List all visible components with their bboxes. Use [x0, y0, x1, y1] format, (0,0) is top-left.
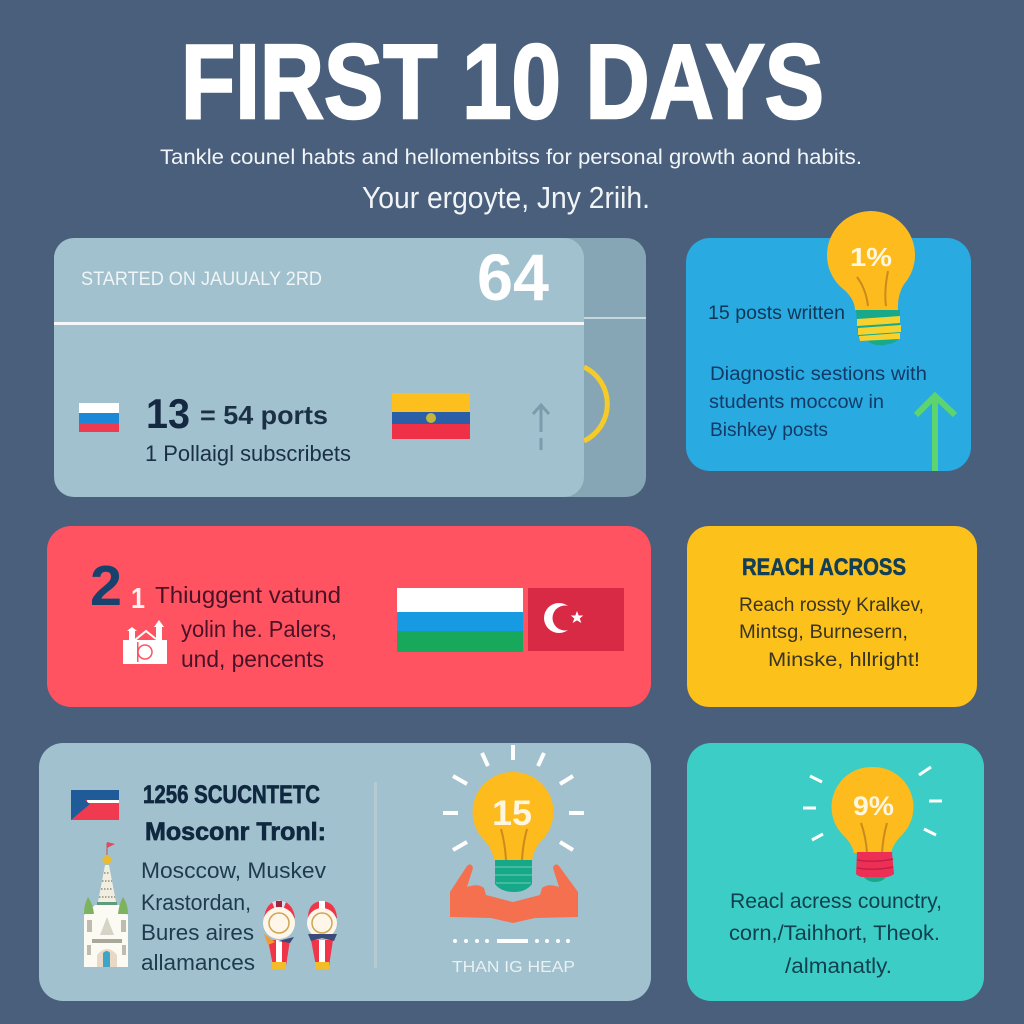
- cities text: allamances: [141, 950, 255, 975]
- divider: [374, 782, 377, 968]
- icon: light bulb 9%: [803, 767, 942, 882]
- icon: two matryoshka figures: [263, 900, 337, 969]
- reach text: Reach rossty Kralkev,: [739, 595, 924, 616]
- diagnostic text: Diagnostic sestions with: [710, 364, 927, 385]
- red panel text: yolin he. Palers,: [181, 616, 337, 642]
- dots: [453, 939, 570, 943]
- big number 64: 64: [477, 240, 549, 314]
- diagnostic text: [709, 364, 927, 441]
- icon: light bulb 1%: 1%: [850, 242, 892, 272]
- subtitle: Tankle counel habts and hellomenbitss for personal growth aond habits.: [160, 146, 862, 169]
- arrow: up: [533, 405, 549, 450]
- big number 2: 2: [90, 554, 122, 618]
- heading number line: 1256 SCUCNTETC: [143, 781, 320, 809]
- cities text: Bures aires: [141, 920, 254, 945]
- teal panel text: corn,/Taihhort, Theok.: [729, 922, 940, 945]
- left figure: [263, 900, 295, 969]
- arrow: green up: [916, 396, 955, 471]
- front card: [54, 238, 584, 497]
- cities text: Mosccow, Muskev: [141, 858, 326, 883]
- red panel text: [155, 582, 341, 672]
- icon: white blue green flag: [397, 588, 523, 652]
- stat 13: 13: [146, 390, 190, 437]
- panel: red: [47, 526, 651, 707]
- started label: STARTED ON JAUUALY 2RD: [81, 269, 322, 290]
- icon: building: [123, 620, 167, 664]
- small number 1: 1: [131, 583, 145, 615]
- panel: reach across: [687, 526, 977, 707]
- red panel text: und, pencents: [181, 646, 324, 672]
- rays: [443, 745, 584, 850]
- bulb caption: THAN IG HEAP: [452, 959, 575, 976]
- cities text: [141, 858, 326, 975]
- reach text: Mintsg, Burnesern,: [739, 622, 908, 643]
- icon: light bulb 9%: 9%: [853, 791, 894, 821]
- back card: [300, 238, 646, 497]
- cities text: Krastordan,: [141, 890, 251, 915]
- teal panel text: Reacl acress counctry,: [730, 890, 942, 913]
- panel: posts written: [686, 211, 971, 471]
- icon: flag: [71, 790, 119, 820]
- icon: light bulb in hands: [443, 745, 584, 943]
- stat posts: = 54 ports: [200, 400, 328, 430]
- teal panel text: /almanatly.: [785, 955, 892, 978]
- posts written text: 15 posts written: [708, 303, 845, 324]
- hands: [450, 864, 578, 923]
- bulb: [473, 772, 553, 860]
- reach text: Minske, hllright!: [768, 650, 920, 671]
- title: FIRST 10 DAYS: [181, 23, 824, 141]
- icon: tricolour flag: [79, 403, 119, 432]
- icon: light bulb 1%: [827, 211, 915, 345]
- heading name line: Mosconr Tronl:: [145, 818, 326, 846]
- icon: yellow arc: [584, 367, 607, 441]
- red panel text: Thiuggent vatund: [155, 582, 341, 608]
- panel: teal reach: [687, 743, 984, 1001]
- right figure: [307, 901, 337, 969]
- icon: cathedral: [84, 842, 128, 967]
- panel: cities: [39, 743, 651, 1001]
- subscribers text: 1 Pollaigl subscribets: [145, 441, 351, 466]
- panel: started stats: [54, 238, 646, 497]
- number: 15: [492, 794, 532, 833]
- diagnostic text: Bishkey posts: [710, 420, 828, 441]
- icon: yellow blue red flag: [392, 393, 470, 439]
- reach text: [739, 595, 924, 671]
- reach heading: REACH ACROSS: [742, 554, 906, 581]
- icon: red crescent flag: [528, 588, 624, 651]
- date line: Your ergoyte, Jny 2riih.: [362, 180, 650, 215]
- diagnostic text: students moccow in: [709, 392, 884, 413]
- teal panel text: [729, 890, 942, 978]
